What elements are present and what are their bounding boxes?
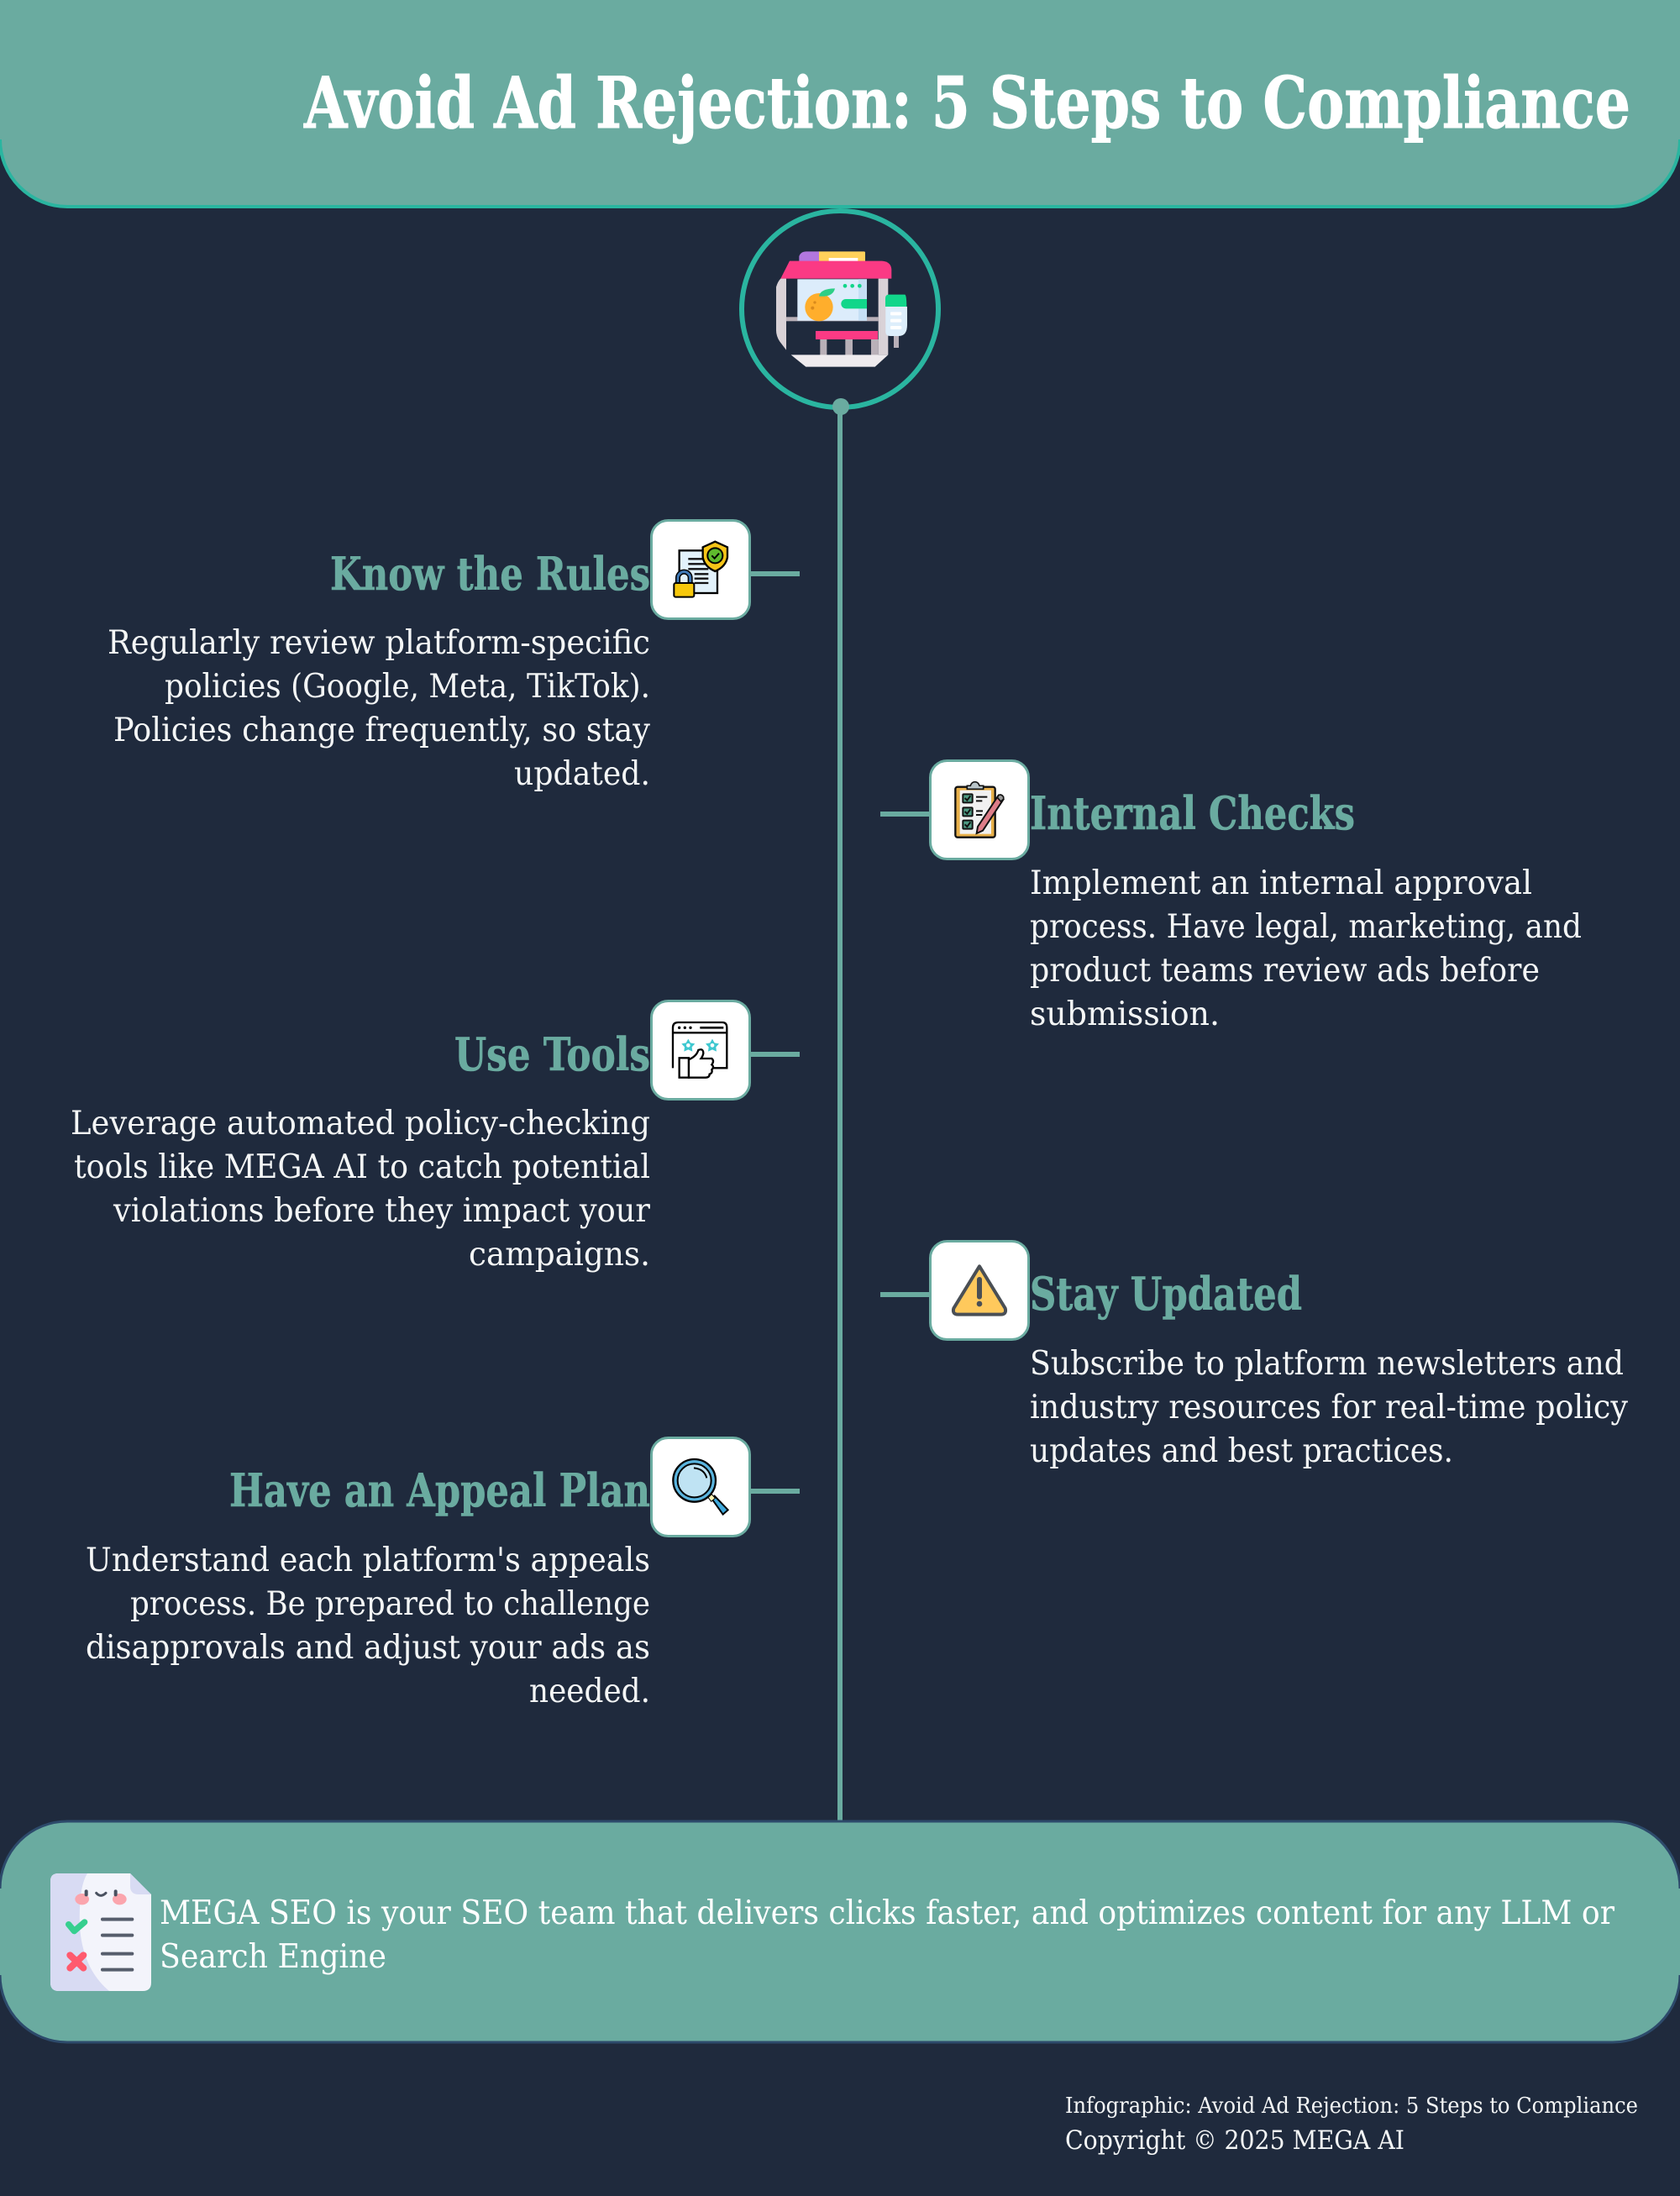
description: tools like MEGA AI to catch potential [74, 1148, 650, 1186]
credits: Infographic: Avoid Ad Rejection: 5 Steps to Compliance [1065, 2094, 1638, 2119]
credits: Copyright © 2025 MEGA AI [1065, 2125, 1404, 2156]
description [1030, 1345, 1628, 1470]
description: Policies change frequently, so stay [113, 712, 650, 749]
description: disapprovals and adjust your ads as [86, 1629, 650, 1667]
heading: Have an Appeal Plan [229, 1463, 650, 1517]
icon: browser window with stars and thumbs up [652, 1001, 749, 1099]
step 2: internal checks [880, 761, 1582, 1033]
description: Implement an internal approval [1030, 864, 1532, 902]
description: Regularly review platform-specific [108, 624, 650, 662]
timeline line [837, 407, 843, 1823]
footer text: Search Engine [160, 1938, 386, 1976]
description: product teams review ads before [1030, 952, 1540, 990]
credits [1065, 2094, 1638, 2156]
description: process. Have legal, marketing, and [1030, 908, 1582, 946]
description: updates and best practices. [1030, 1432, 1453, 1470]
header banner [0, 0, 1680, 207]
description [71, 1105, 650, 1274]
hero icon: bus stop billboard in circle [742, 211, 938, 415]
description: campaigns. [469, 1236, 650, 1274]
step 4: stay updated [880, 1242, 1628, 1470]
description: submission. [1030, 996, 1220, 1033]
heading: Internal Checks [1030, 786, 1355, 840]
description: industry resources for real-time policy [1030, 1389, 1628, 1426]
footer banner [0, 1821, 1680, 2042]
description [1030, 864, 1582, 1033]
icon: document with lock and shield [652, 521, 749, 618]
icon: clipboard and pencil [931, 761, 1028, 859]
description: Subscribe to platform newsletters and [1030, 1345, 1624, 1383]
icon: warning triangle [931, 1242, 1028, 1339]
description: policies (Google, Meta, TikTok). [165, 668, 650, 706]
heading: Know the Rules [330, 547, 650, 601]
step 3: use tools [71, 1001, 800, 1274]
step 5: have an appeal plan [86, 1438, 800, 1710]
heading: Stay Updated [1030, 1267, 1302, 1321]
heading: Use Tools [454, 1027, 650, 1081]
icon: magnifying glass [652, 1438, 749, 1536]
description: Understand each platform's appeals [86, 1542, 650, 1579]
description: violations before they impact your [113, 1192, 650, 1230]
footer text [160, 1894, 1614, 1976]
icon: checklist document [50, 1873, 151, 1991]
description: process. Be prepared to challenge [130, 1585, 650, 1623]
description [86, 1542, 650, 1710]
description: needed. [529, 1673, 650, 1710]
description: Leverage automated policy-checking [71, 1105, 650, 1143]
description: updated. [514, 755, 650, 793]
step 1: know the rules [108, 521, 800, 793]
description [108, 624, 650, 793]
